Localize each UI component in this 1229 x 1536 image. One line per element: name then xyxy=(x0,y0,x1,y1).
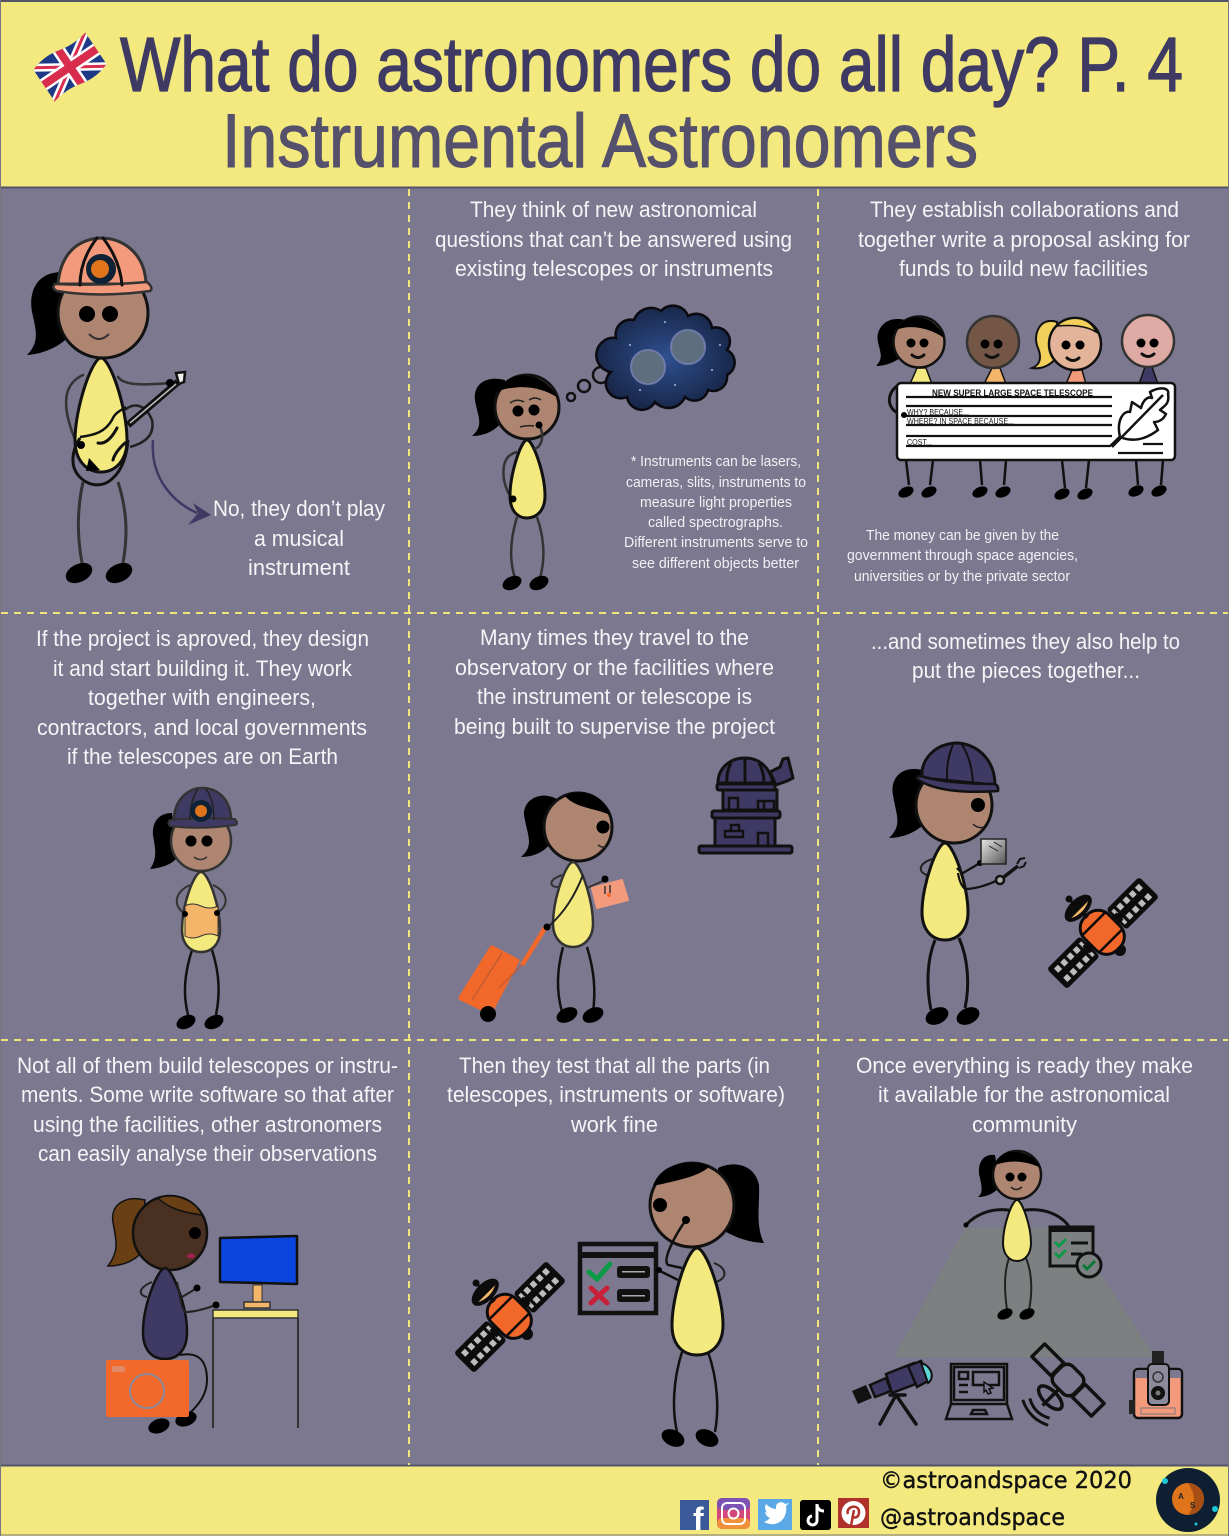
icon: galaxy thought cloud xyxy=(596,306,735,410)
heading text: contractors, and local governments xyxy=(37,715,367,740)
heading text: Then they test that all the parts (in xyxy=(459,1053,770,1078)
heading text: telescopes, instruments or software) xyxy=(447,1082,785,1107)
icon: quill xyxy=(1119,388,1168,440)
arrow xyxy=(153,440,211,525)
panel 4: design and build xyxy=(36,626,369,1032)
heading text: it available for the astronomical xyxy=(878,1082,1170,1107)
logo: A xyxy=(1178,1492,1184,1501)
footnote text xyxy=(847,527,1078,585)
proposal board: WHY? BECAUSE... xyxy=(907,408,969,417)
proposal board: WHERE? IN SPACE BECAUSE... xyxy=(907,417,1014,426)
heading text xyxy=(447,1053,785,1137)
panel 6: assembling xyxy=(871,629,1180,1028)
heading text: using the facilities, other astronomers xyxy=(33,1112,382,1137)
figure: astronomer checking xyxy=(650,1163,764,1450)
figure: astronomer with wrench xyxy=(889,743,1026,1028)
heading text: the instrument or telescope is xyxy=(477,684,752,709)
panel 5: travel xyxy=(454,625,793,1026)
icon: wrench xyxy=(1000,866,1018,880)
icon: violin xyxy=(73,372,185,485)
heading text: together with engineers, xyxy=(88,685,316,710)
text: no, they don't play: a musical xyxy=(254,526,344,551)
panel 8: testing xyxy=(428,1053,785,1450)
icon: pinterest xyxy=(838,1498,869,1528)
proposal board xyxy=(889,383,1175,460)
icon: satellite outline xyxy=(1003,1341,1107,1445)
footnote text: Different instruments serve to xyxy=(624,534,808,551)
heading text xyxy=(36,626,369,769)
footnote text: cameras, slits, instruments to xyxy=(626,474,806,491)
heading text: together write a proposal asking for xyxy=(858,227,1190,252)
heading text: They establish collaborations and xyxy=(870,197,1179,222)
footnote text: universities or by the private sector xyxy=(854,568,1070,585)
spotlight trapezoid xyxy=(894,1228,1155,1357)
heading text: being built to supervise the project xyxy=(454,714,776,739)
icon: camera xyxy=(1129,1351,1182,1418)
heading text xyxy=(871,629,1180,683)
footnote text xyxy=(624,453,808,572)
proposal board: NEW SUPER LARGE SPACE TELESCOPE xyxy=(932,388,1093,398)
heading text: can easily analyse their observations xyxy=(38,1141,377,1166)
figure: astronomer with navy helmet and plans xyxy=(150,788,237,1032)
footer band xyxy=(0,1465,1229,1536)
heading text: observatory or the facilities where xyxy=(455,655,774,680)
icon: laptop xyxy=(946,1364,1012,1419)
footnote text: government through space agencies, xyxy=(847,547,1078,564)
panel 9: available to community xyxy=(852,1053,1193,1445)
heading text: Not all of them build telescopes or instru- xyxy=(17,1053,398,1078)
heading text: Many times they travel to the xyxy=(480,625,749,650)
logo xyxy=(1156,1468,1220,1532)
heading text xyxy=(858,197,1190,281)
heading text: Once everything is ready they make xyxy=(856,1053,1193,1078)
icon: orange camera stool xyxy=(106,1360,189,1417)
icon: facebook xyxy=(680,1500,709,1536)
figure: astronomer with hard hat xyxy=(27,238,170,587)
icon: thought bubbles xyxy=(567,367,609,401)
icon: telescope xyxy=(852,1361,932,1424)
icon: UK flag xyxy=(34,32,106,102)
proposal board: COST... xyxy=(907,438,932,447)
desk and monitor xyxy=(213,1236,298,1428)
footer credits xyxy=(880,1468,1132,1531)
heading text: put the pieces together... xyxy=(912,658,1140,683)
icon: checklist badge xyxy=(1050,1227,1101,1277)
panel 3: proposal xyxy=(847,197,1190,585)
heading text: existing telescopes or instruments xyxy=(455,256,773,281)
icon: instagram xyxy=(717,1498,750,1529)
footnote text: called spectrographs. xyxy=(648,514,783,531)
text: no, they don't play: instrument xyxy=(248,555,351,580)
figure: presenting astronomer xyxy=(964,1151,1068,1322)
figures: four collaborators xyxy=(876,315,1174,502)
icon: tiktok xyxy=(800,1500,831,1530)
heading text: ments. Some write software so that after xyxy=(21,1082,394,1107)
icon: observatory xyxy=(699,758,793,853)
panel 2: new questions xyxy=(435,197,808,593)
heading text: work fine xyxy=(570,1112,658,1137)
heading text: funds to build new facilities xyxy=(899,256,1148,281)
logo: S xyxy=(1190,1501,1196,1510)
icon: twitter xyxy=(758,1499,792,1530)
footnote text: The money can be given by the xyxy=(866,527,1059,544)
header band xyxy=(0,0,1229,188)
heading text: ...and sometimes they also help to xyxy=(871,629,1180,654)
panel 1: guitar figure xyxy=(27,238,386,587)
heading text xyxy=(856,1053,1193,1137)
footer credits: ©astroandspace 2020 xyxy=(880,1468,1132,1494)
heading text xyxy=(435,197,792,281)
figure: thinking astronomer xyxy=(472,375,559,593)
heading text: community xyxy=(972,1112,1078,1137)
heading text xyxy=(454,625,776,739)
subtitle: Instrumental Astronomers xyxy=(222,99,978,184)
heading text: it and start building it. They work xyxy=(53,656,353,681)
heading text: if the telescopes are on Earth xyxy=(67,744,338,769)
panel 7: software xyxy=(17,1053,398,1436)
heading text: If the project is aproved, they design xyxy=(36,626,369,651)
footnote text: measure light properties xyxy=(640,494,792,511)
text: no, they don't play xyxy=(213,496,386,580)
figure: astronomer travelling xyxy=(521,792,628,1026)
icon: satellite xyxy=(428,1235,576,1383)
heading text: They think of new astronomical xyxy=(470,197,757,222)
figure: astronomer at computer xyxy=(108,1196,220,1436)
footer credits: @astroandspace xyxy=(880,1505,1065,1531)
icon: suitcase xyxy=(461,928,545,1022)
icon: checklist xyxy=(580,1244,656,1313)
heading text xyxy=(17,1053,398,1166)
footnote text: see different objects better xyxy=(632,555,799,572)
heading text: questions that can’t be answered using xyxy=(435,227,792,252)
text: no, they don't play: No, they don’t play xyxy=(213,496,386,521)
icon: satellite xyxy=(1021,851,1169,999)
icon: facebook: f xyxy=(693,1501,704,1536)
footnote text: * Instruments can be lasers, xyxy=(631,453,801,470)
icon: folder xyxy=(592,880,628,908)
